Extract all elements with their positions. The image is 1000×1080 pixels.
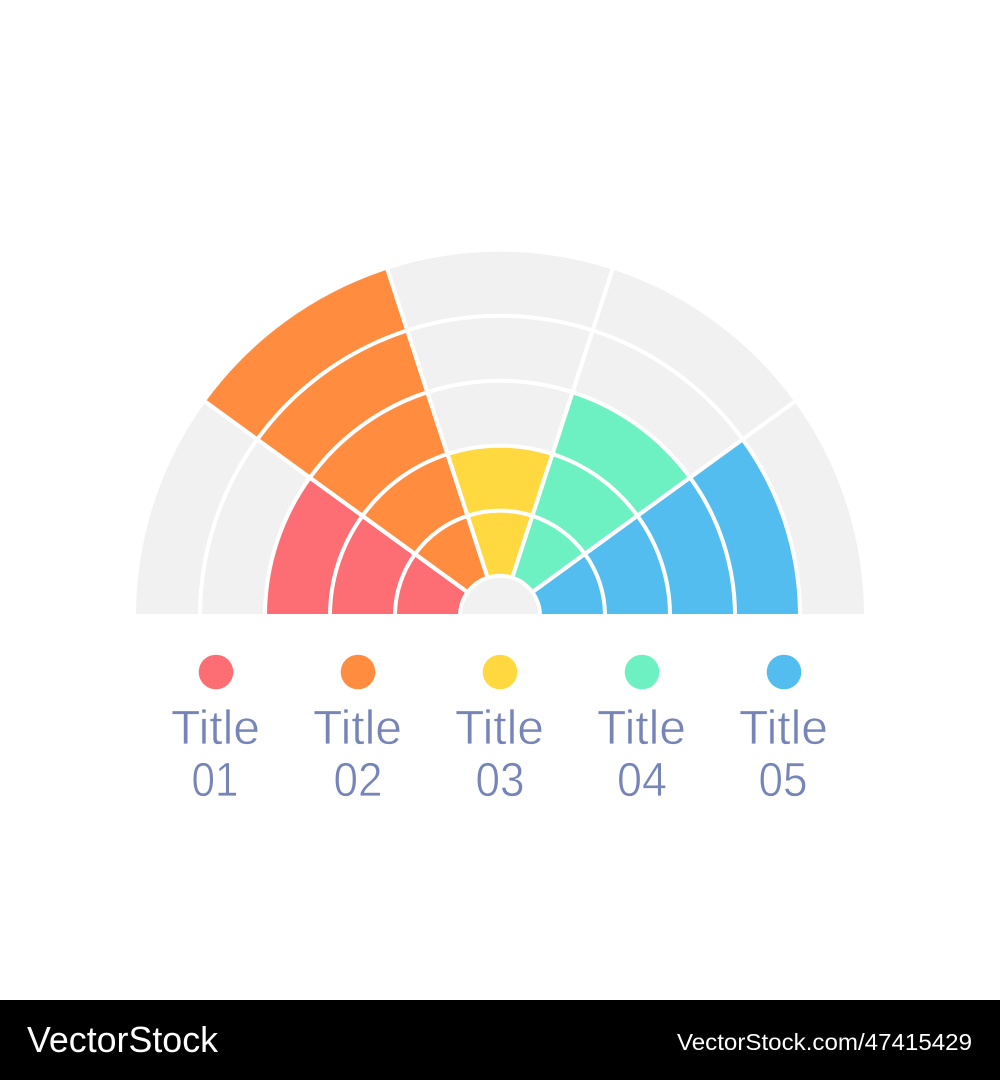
semicircular radial chart bbox=[136, 252, 864, 614]
segment 5: blue, 4 of 5 rings filled bbox=[532, 404, 864, 614]
legend item 3: 03 bbox=[476, 754, 524, 807]
legend item 2: Title bbox=[313, 702, 402, 755]
legend item 5: Title bbox=[739, 702, 828, 755]
segment 3: yellow, 2 of 5 rings filled bbox=[386, 252, 610, 576]
watermark footer bar: VectorStock bbox=[27, 1019, 219, 1060]
center hub bbox=[458, 574, 542, 614]
legend item 4: 04 bbox=[617, 754, 667, 807]
segment 1: red, 3 of 5 rings filled bbox=[136, 404, 465, 614]
segment 2: orange, 5 of 5 rings filled bbox=[206, 270, 485, 593]
legend item 1: 01 bbox=[192, 754, 238, 807]
legend item 4: Title bbox=[597, 702, 686, 755]
legend item 3 bbox=[455, 655, 544, 807]
watermark footer bar bbox=[0, 1000, 1000, 1080]
legend item 5 bbox=[739, 655, 828, 807]
legend item 5: 05 bbox=[758, 754, 808, 807]
legend item 4 bbox=[597, 655, 686, 807]
legend item 2 bbox=[313, 655, 402, 807]
legend item 1 bbox=[171, 655, 260, 807]
legend item 1: Title bbox=[171, 702, 260, 755]
watermark footer bar: VectorStock.com/47415429 bbox=[677, 1029, 972, 1055]
segment 4: green, 3 of 5 rings filled bbox=[511, 270, 793, 590]
legend item 3: Title bbox=[455, 702, 544, 755]
legend item 2: 02 bbox=[334, 754, 382, 807]
